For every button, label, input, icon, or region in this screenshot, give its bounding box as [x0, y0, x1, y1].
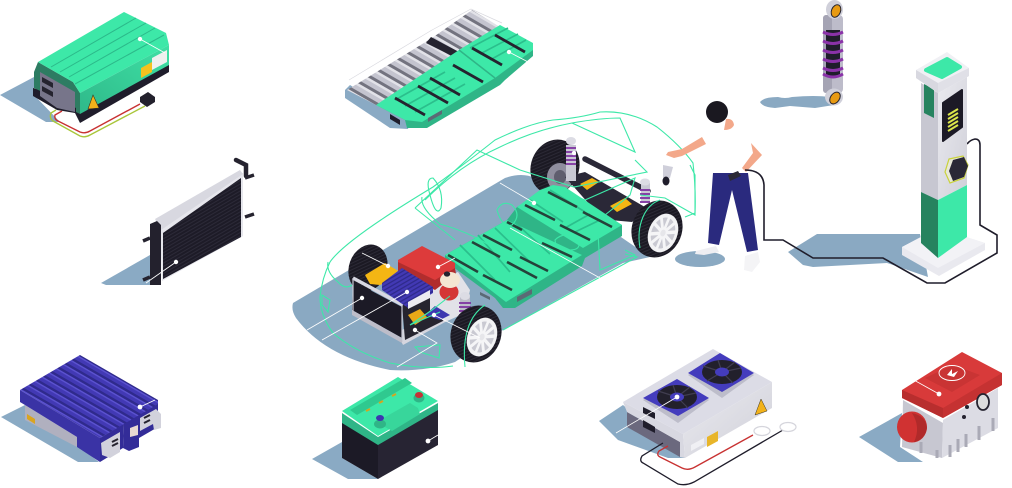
front electronics bay: [352, 246, 471, 345]
wheel: rear near: [623, 193, 691, 265]
item: 12V battery: [312, 377, 438, 479]
charging handle on car: [662, 165, 673, 186]
wheel: front near: [442, 298, 510, 370]
rear suspension and axle: [565, 137, 650, 222]
charging cable: [745, 139, 997, 283]
car floor shadow: [292, 175, 650, 370]
station shadow: [788, 234, 928, 277]
wheel: rear far: [522, 132, 588, 202]
wheel: front far: [342, 239, 394, 297]
item: traction battery box: [0, 12, 169, 137]
item: power electronics module: [1, 355, 161, 462]
car outline: [320, 112, 695, 367]
item: shock absorber: [760, 0, 843, 108]
charging station: [902, 52, 985, 276]
person plugging charger: [662, 101, 762, 272]
battery pack in car: [445, 185, 622, 308]
item: radiator: [101, 160, 254, 285]
item: charger with fans: [599, 349, 796, 485]
item: red junction box: [859, 352, 1002, 462]
item: upper battery pack: [345, 9, 533, 129]
leader lines in car: [307, 151, 600, 367]
